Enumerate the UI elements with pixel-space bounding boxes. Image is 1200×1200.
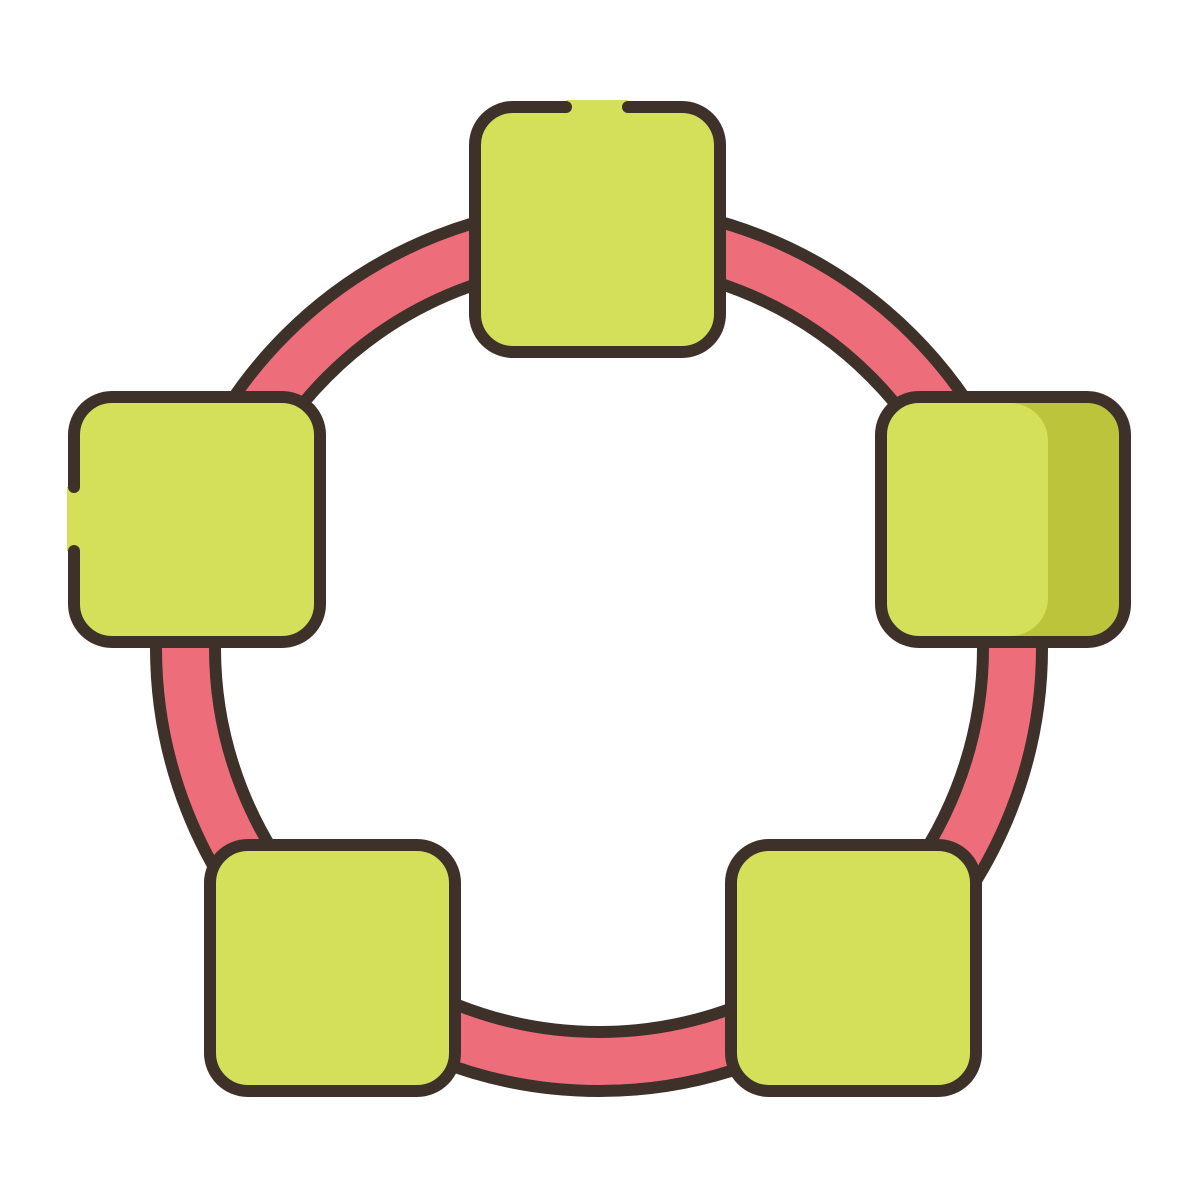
node: bottom-left bbox=[210, 845, 455, 1091]
node: right (shaded) bbox=[881, 397, 1125, 642]
ring bbox=[156, 205, 1042, 1091]
node: left bbox=[67, 397, 320, 642]
node: bottom-right bbox=[731, 845, 976, 1091]
node: top bbox=[475, 100, 720, 352]
